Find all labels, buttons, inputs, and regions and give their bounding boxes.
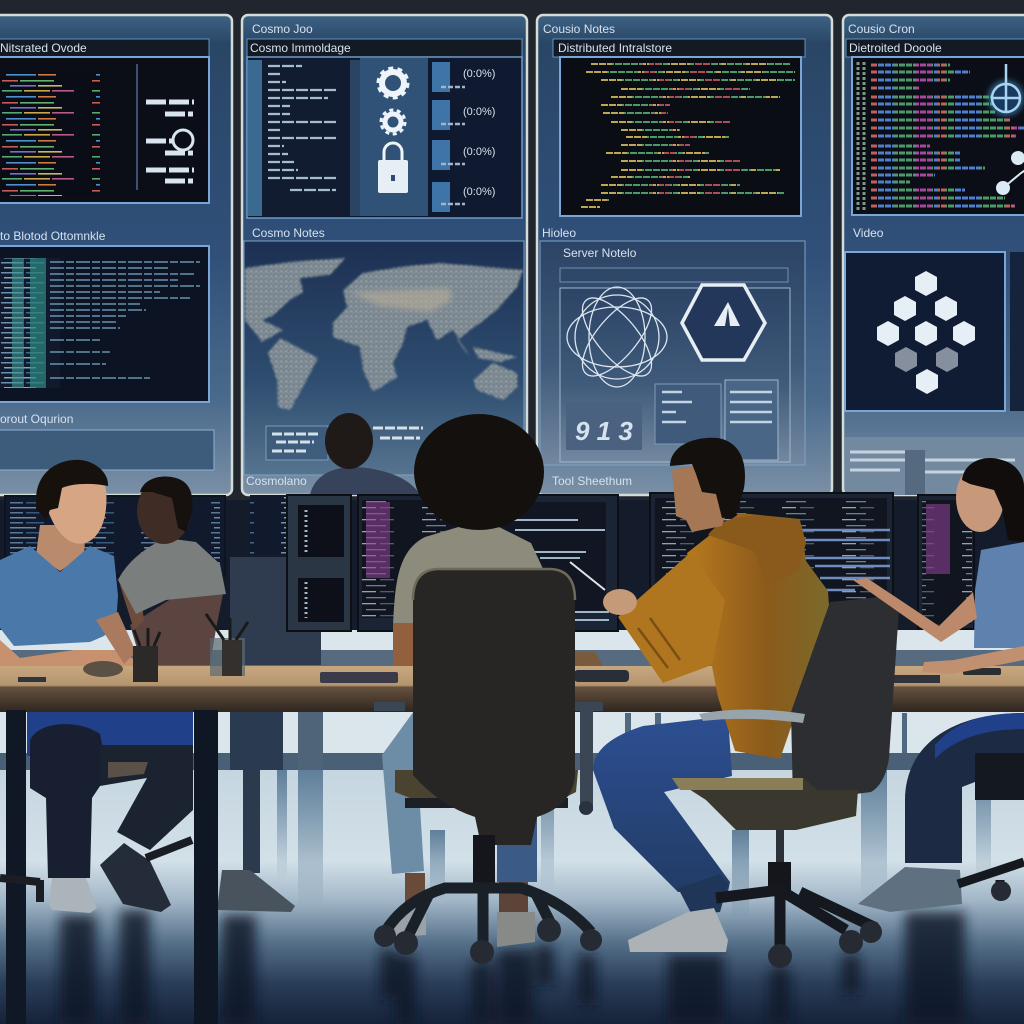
backrest [791,596,899,802]
hair [962,458,1024,542]
office chair: right [672,596,899,968]
panel: right wall display [843,15,1024,495]
office chair: center [374,569,603,964]
monitors: right [650,493,974,629]
hoodie torso [687,513,830,759]
arm brackets [374,702,603,811]
screen: hex network [845,252,1024,411]
lower arm [922,646,1024,674]
legs: center person [382,711,537,947]
dark shoe [100,843,171,912]
keyboard center [320,672,398,683]
person: seated back figure [310,413,420,495]
backrest [413,569,575,845]
keyboard far right [884,675,940,683]
desk leg far left [6,710,26,1024]
heading: bottom: Cosmolano [246,474,307,488]
arm [120,585,144,630]
neck and face [672,462,730,532]
torso [974,542,1024,648]
subheading band: Cosmo Immoldage [250,41,351,55]
pen cup right [206,614,248,676]
neck [36,525,86,571]
far leg [100,745,193,850]
person: gray shirt [118,477,226,630]
screen: code and globe [852,57,1024,215]
person: orange hoodie [570,438,830,952]
wheels [374,918,602,964]
sub-panel: server notes [540,241,805,465]
forearm near [0,640,140,678]
heading: tools: Tool Sheethum [552,474,632,488]
near leg [30,724,108,878]
panel: left wall display [0,15,232,495]
status rows: (0:0%) [463,106,495,118]
screen: code [560,57,801,216]
lower strip [0,430,214,470]
legs [905,713,1024,863]
seat [672,778,858,830]
heading: center-right panel: Cousio Notes [543,22,615,36]
desk [0,614,1024,1024]
torso [0,546,118,646]
chair seat [108,762,148,778]
hand [603,589,637,615]
mouse [83,661,123,677]
heading band: left panel top [0,39,209,57]
armrest [699,710,805,723]
heading: server: Server Notelo [563,246,637,260]
monitors: center [287,495,618,631]
number readout: 9 1 3 [575,416,633,446]
status rows [432,62,495,212]
heading band: left panel top: Nitsrated Ovode [0,41,87,55]
pen cup left [133,628,160,682]
hexagon icon [682,285,765,360]
network globe [567,287,667,387]
window band behind desk [0,630,1024,770]
status rows: (0:0%) [463,146,495,158]
head [42,473,106,544]
base [716,890,876,948]
head [956,464,1004,532]
phone [963,668,1001,675]
legs: left person [27,712,295,913]
column [473,835,495,890]
hair [36,460,108,520]
screen: infrastructure dashboard [247,57,522,218]
screen: data table [0,246,209,402]
floor dark reflections [60,910,965,1024]
person: right, blue shirt [853,458,1024,912]
torso [118,538,226,614]
cuff [678,874,728,915]
subheading band [846,39,1024,57]
widgets [655,380,778,460]
panel: center-left wall display [242,15,527,495]
left chair base [0,840,192,902]
keyboard right [574,670,629,682]
heading: right panel: Cousio Cron [848,22,915,36]
icon: network node [996,151,1024,195]
arm bar [405,798,568,808]
hair [670,438,745,518]
heading: video right: Video [853,226,884,240]
icon: lock [378,143,408,193]
hood [708,516,806,585]
world map [244,241,524,475]
floor [0,770,1024,1024]
subheading band [553,39,805,57]
thigh [593,716,732,892]
right chair base [958,753,1024,901]
subheading band [247,39,522,57]
desk leg left [194,710,218,1024]
status rows: (0:0%) [463,186,495,198]
icon: gear small [381,110,405,134]
panel: center-right wall display [537,15,832,495]
white shoe [49,878,97,913]
floor column reflections [277,770,991,920]
heading: video: Hioleo [542,226,576,240]
column [776,830,784,862]
status rows: (0:0%) [463,68,495,80]
shoe [628,908,728,952]
head [137,478,191,544]
screen: code with arrows [0,57,209,203]
lower strip [845,437,1024,495]
stylus [570,562,605,590]
wall background [0,0,1024,500]
person: left, blue t-shirt [0,460,140,678]
subheading band: Dietroited Dooole [849,41,942,55]
shoes [858,867,962,912]
forearm far [96,612,136,664]
subheading band: Distributed Intralstore [558,41,672,55]
hoodie arm [618,553,725,683]
heading: map: Cosmo Notes [252,226,325,240]
phone left [18,677,46,682]
icon: globe [988,64,1024,116]
number readout [566,402,642,450]
back shoe [217,870,295,912]
sleeve stripes [638,618,680,668]
arm [853,578,977,642]
under-desk chair behind [230,712,323,873]
icon: gear large [378,68,408,98]
heading: left panel middle: to Blotod Ottomnkle [0,229,106,243]
chair behind [230,557,321,665]
wheels [768,921,882,968]
person: afro hair, seated center [393,414,603,680]
monitors: far left pair [5,495,286,576]
heading: left panel bottom: orout Oqurion [0,412,73,426]
heading: center-left panel: Cosmo Joo [252,22,313,36]
jeans thigh [27,712,193,756]
seat [395,770,578,802]
base [385,888,591,948]
chair mesh behind left [130,589,224,665]
